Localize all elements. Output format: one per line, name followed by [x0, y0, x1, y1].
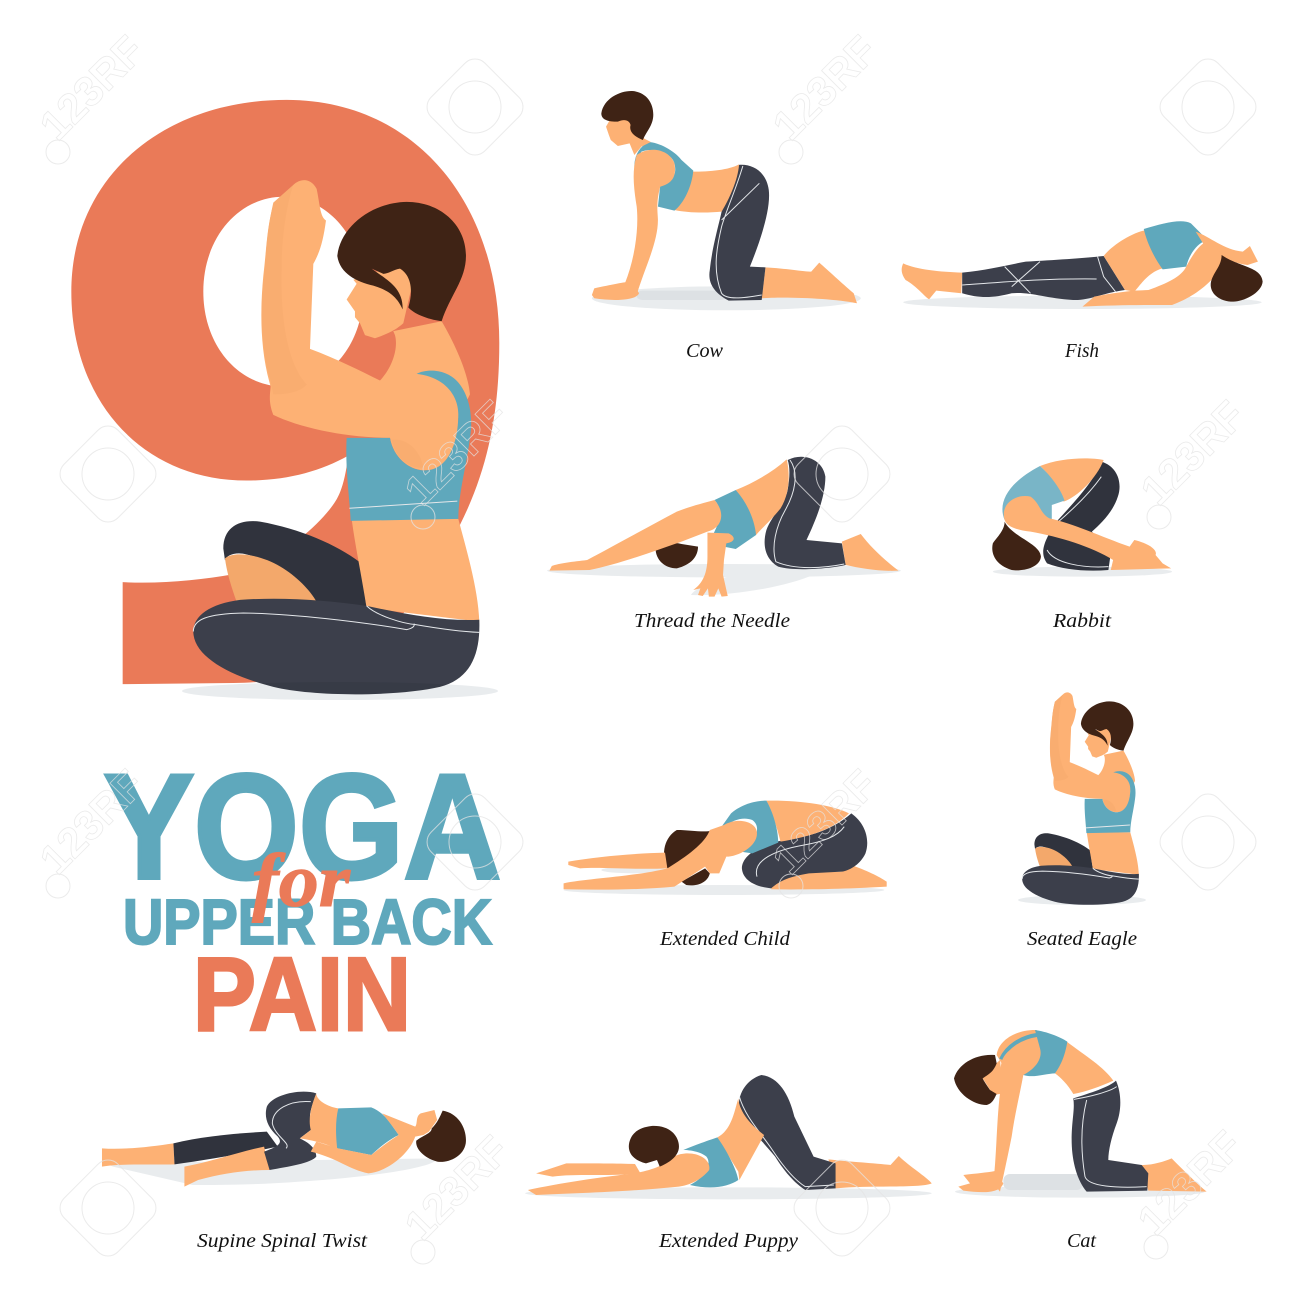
leggings: [765, 457, 846, 569]
leggings: [739, 1075, 836, 1190]
torso: [736, 459, 789, 535]
torso: [1055, 1042, 1113, 1094]
back arm: [568, 853, 667, 869]
upper arm: [536, 1163, 640, 1177]
torso: [717, 1098, 764, 1180]
pose: seated eagle: [1018, 692, 1146, 905]
bra: [1144, 221, 1207, 269]
pose: extended puppy: [525, 1075, 932, 1199]
foot: [828, 1156, 932, 1188]
hair: [1211, 255, 1263, 302]
arm and shoulder: [1082, 242, 1224, 307]
foot: [842, 534, 898, 571]
feet: [771, 865, 887, 889]
torso: [300, 1093, 338, 1150]
lower arm: [528, 1153, 709, 1195]
stock watermarks: 123RF: [1129, 1122, 1251, 1244]
bra body: [1023, 1030, 1067, 1076]
hair: [337, 202, 466, 321]
shadow: [903, 296, 1262, 309]
bra: [1002, 466, 1065, 520]
title: YOGA for UPPER BACK PAIN: [104, 743, 501, 1053]
calf and foot: [762, 263, 857, 303]
neck and face: [982, 1060, 1003, 1095]
inner calf: [225, 554, 317, 602]
shoulder backing: [997, 1030, 1042, 1075]
YOGA: YOGA: [104, 743, 501, 910]
arm: [1004, 496, 1171, 570]
waist: [674, 164, 739, 213]
shadow: [955, 1186, 1205, 1198]
hair: [416, 1111, 466, 1162]
torso: [1040, 458, 1104, 502]
shadow: [1018, 895, 1146, 905]
front leg skin: [184, 1147, 270, 1187]
leggings: [962, 256, 1125, 300]
big number 9: [71, 100, 499, 684]
label: Extended Child: Extended Child: [659, 928, 791, 950]
label: Fish: Fish: [1064, 340, 1099, 362]
leggings: [1072, 1081, 1148, 1192]
label: Supine Spinal Twist: Supine Spinal Twist: [197, 1230, 367, 1252]
PAIN: PAIN: [193, 937, 411, 1053]
leggings: [742, 813, 867, 888]
UPPER BACK: UPPER BACK: [123, 886, 492, 958]
neck and face: [1196, 232, 1258, 265]
threaded arm and hand: [693, 533, 734, 597]
shadow: [592, 286, 861, 310]
arm, neck and face: [311, 1110, 437, 1173]
leggings: [709, 165, 769, 301]
stock watermarks: 123RF: [764, 761, 886, 883]
main figure ground shadow: [182, 682, 498, 700]
foot: [1142, 1158, 1207, 1192]
face: [347, 264, 413, 338]
figure: [1022, 692, 1139, 905]
label: Rabbit: Rabbit: [1052, 610, 1111, 632]
hair: [992, 522, 1041, 570]
arm: [993, 1044, 1041, 1192]
armpit shade: [392, 440, 423, 468]
back knee: [223, 521, 367, 608]
bra: [707, 490, 756, 549]
hair: [954, 1055, 997, 1105]
label: Extended Puppy: Extended Puppy: [658, 1230, 798, 1252]
hair: [601, 91, 653, 140]
stock watermarks: 123RF: [31, 27, 153, 149]
face and neck: [606, 118, 651, 155]
bra: [683, 1137, 738, 1187]
extended arm: [549, 500, 721, 571]
hair: [664, 830, 712, 868]
front arm: [564, 821, 757, 890]
hair: [629, 1126, 679, 1167]
leggings: [1043, 462, 1120, 571]
pose: cat: [954, 1030, 1207, 1198]
stock watermarks: 123RF: [1132, 392, 1254, 514]
pose: supine spinal twist: [102, 1092, 466, 1187]
hand: [958, 1171, 1003, 1192]
crossed leg: [193, 599, 479, 694]
shadow: [993, 567, 1172, 577]
shin and foot: [902, 263, 962, 299]
shadow: [547, 564, 901, 577]
pose: extended child: [564, 801, 887, 895]
shadow: [105, 1158, 437, 1185]
pose: cow: [592, 91, 861, 310]
arm: [625, 150, 675, 295]
bra: [722, 801, 778, 853]
hair: [656, 543, 698, 568]
torso: [1104, 230, 1163, 292]
bra: [336, 1107, 399, 1155]
arms, neck and shoulder: [261, 180, 470, 470]
shadow: [525, 1187, 932, 1199]
rear forearm shade: [262, 185, 307, 394]
label: Thread the Needle: Thread the Needle: [634, 610, 790, 632]
for: for: [252, 839, 351, 923]
label: Cat: Cat: [1067, 1230, 1096, 1252]
bra strap: [1001, 1035, 1039, 1059]
lower torso: [352, 519, 479, 622]
stock watermarks: 123RF: [31, 761, 153, 883]
bra: [634, 142, 693, 211]
shadow: [564, 885, 884, 895]
hand: [592, 282, 639, 300]
pose: thread the needle: [547, 457, 901, 597]
torso: [766, 801, 849, 842]
label: Cow: Cow: [686, 340, 724, 362]
sports bra: [346, 371, 471, 521]
pose: fish: [902, 221, 1263, 309]
back leg skin: [102, 1143, 175, 1167]
pose: rabbit: [992, 458, 1172, 577]
stock watermarks: 123RF: [396, 392, 518, 514]
stock watermarks: 123RF: [764, 27, 886, 149]
main figure: seated eagle pose: [193, 180, 479, 694]
label: Seated Eagle: Seated Eagle: [1027, 928, 1137, 950]
back leg leggings: [173, 1132, 278, 1164]
stock watermarks: 123RF: [396, 1127, 518, 1249]
hip leggings: [264, 1092, 316, 1170]
